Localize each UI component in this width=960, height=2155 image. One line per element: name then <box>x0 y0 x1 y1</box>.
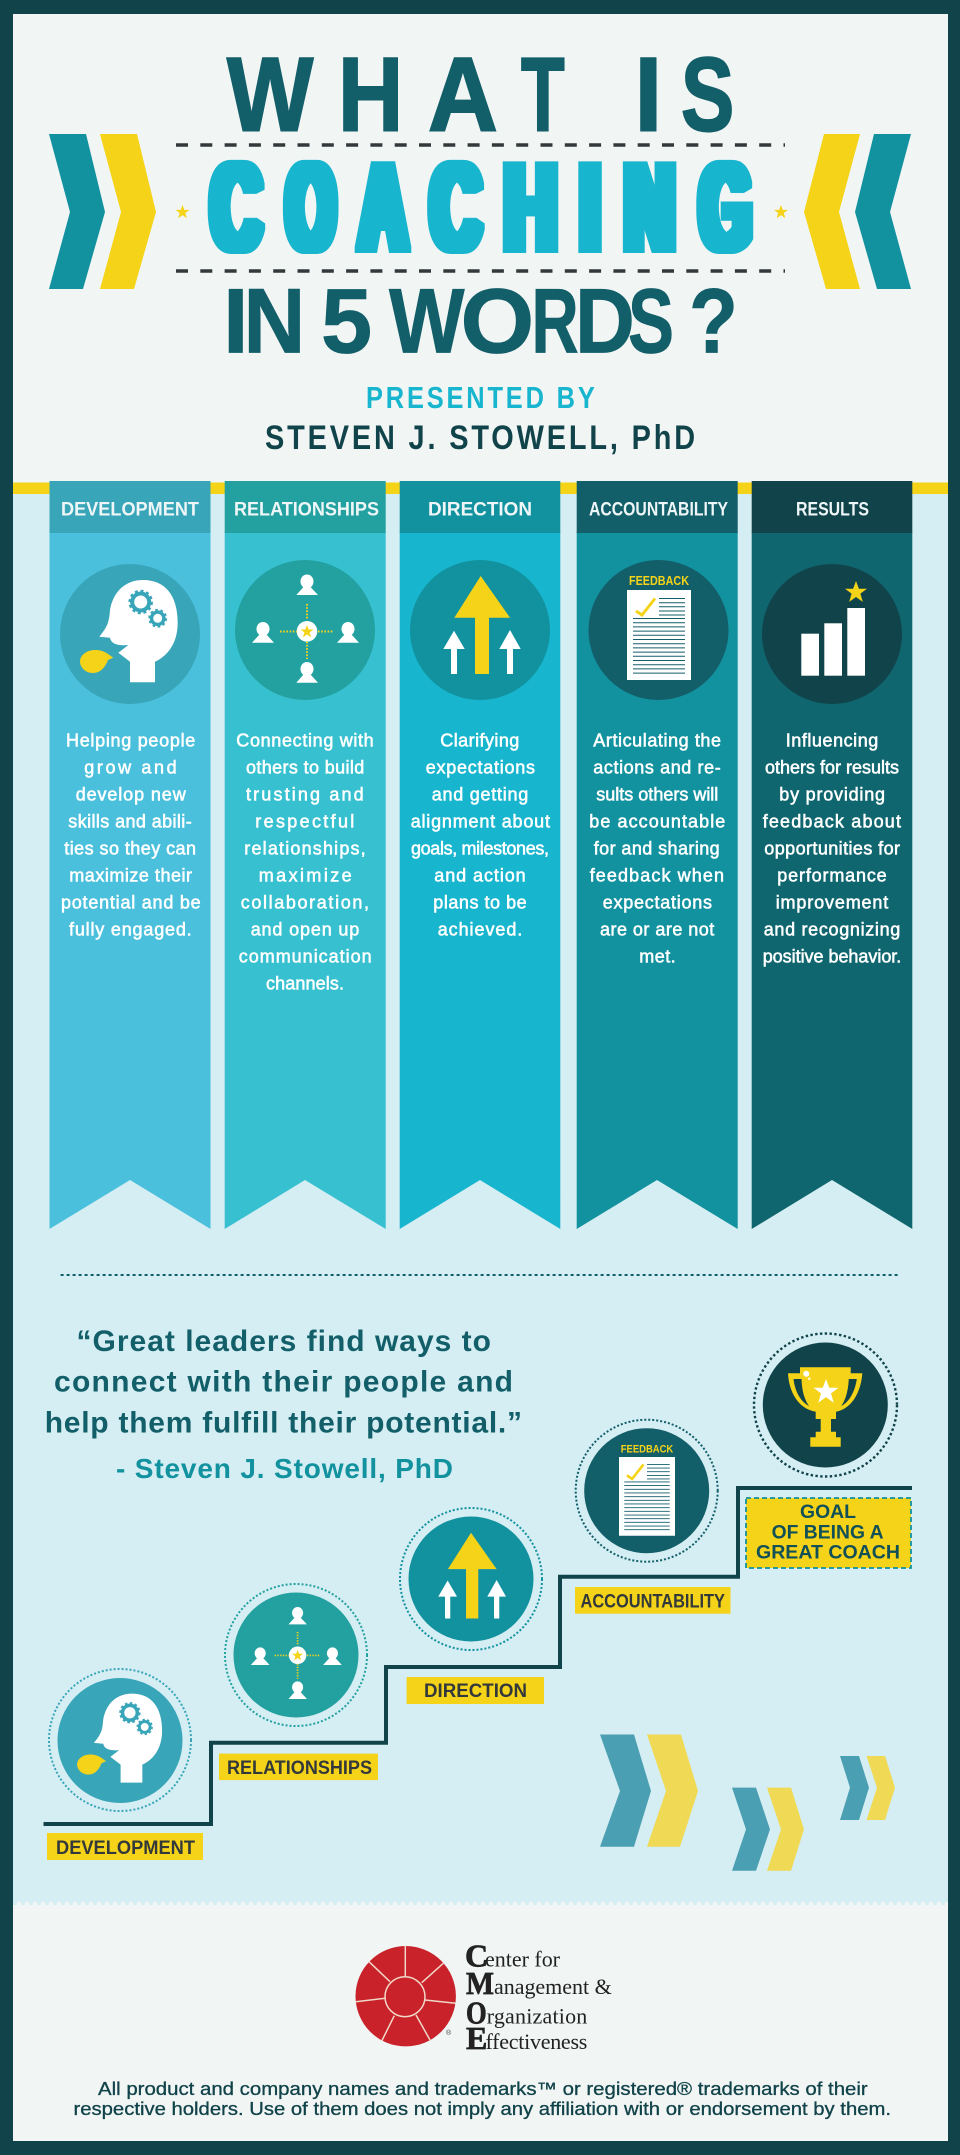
text: direction: goals, milestones, <box>411 838 549 858</box>
title: coaching: O <box>287 137 335 277</box>
icon: arrows up <box>410 560 550 700</box>
title: in 5 words: D <box>575 270 635 373</box>
text: results: by providing <box>779 784 885 804</box>
icon: connected people <box>235 560 375 700</box>
title: what is <box>227 35 734 154</box>
footer background <box>13 1902 948 2141</box>
title: coaching: A <box>360 137 407 276</box>
decorative chevrons medium <box>732 1788 804 1871</box>
goal label: OF BEING A <box>772 1521 884 1543</box>
footer disclaimer: All product and company names and trademarks™ or registered® trademarks of their <box>98 2079 868 2099</box>
logo: CMOE wheel <box>356 1946 456 2046</box>
title: in 5 words: 5 <box>321 271 372 373</box>
text: relationships: channels. <box>266 974 344 994</box>
title: in 5 words: I <box>223 271 249 373</box>
text: results: feedback about <box>763 812 901 832</box>
text: accountability: are or are not <box>600 920 714 940</box>
text: direction: Clarifying <box>440 730 519 750</box>
text: development: skills and abili- <box>68 812 192 832</box>
text: development: grow and <box>84 758 177 778</box>
step label: direction <box>407 1677 544 1704</box>
step label: development: DEVELOPMENT <box>56 1838 195 1859</box>
text: relationships <box>236 730 374 994</box>
logo: organization name: anagement & <box>494 1974 612 1999</box>
step label: accountability <box>575 1587 730 1614</box>
text: relationships: others to build <box>246 758 364 778</box>
text: results: and recognizing <box>764 920 900 940</box>
text: relationships: and open up <box>251 920 359 940</box>
text: accountability: feedback when <box>590 866 724 886</box>
text: relationships: respectful <box>255 812 354 832</box>
heading: development: DEVELOPMENT <box>61 498 199 520</box>
title: coaching: N <box>625 139 674 277</box>
goal label: GREAT COACH <box>756 1541 900 1563</box>
chevrons right <box>804 134 911 289</box>
text: development: ties so they can <box>64 838 196 858</box>
main light blue background <box>13 494 948 1902</box>
title: in 5 words: W <box>389 270 465 373</box>
title: what is: H <box>338 35 403 153</box>
icon: feedback document <box>588 560 728 700</box>
text: accountability: for and sharing <box>594 838 720 858</box>
text: direction: plans to be <box>433 892 527 912</box>
logo: CMOE wheel: ® <box>446 2029 452 2037</box>
logo: organization name: M <box>466 1965 494 2001</box>
step icon: relationships <box>225 1584 367 1726</box>
text: accountability: actions and re- <box>593 758 721 778</box>
step label: relationships: RELATIONSHIPS <box>227 1758 372 1779</box>
title: in 5 words <box>223 269 738 373</box>
text: accountability <box>589 730 725 966</box>
decorative chevrons small <box>840 1756 895 1820</box>
text: accountability: sults others will <box>596 784 718 804</box>
text: accountability: be accountable <box>589 812 725 832</box>
step icon: accountability: FEEDBACK <box>621 1444 674 1456</box>
text: accountability: expectations <box>603 892 712 912</box>
text: development: potential and be <box>61 892 201 912</box>
text: accountability: met. <box>639 946 676 966</box>
icon: bar chart with star <box>762 564 902 704</box>
presenter name: STEVEN J. STOWELL, PhD <box>265 418 695 457</box>
logo: organization name: enter for <box>485 1947 561 1972</box>
title: in 5 words: ? <box>689 270 738 373</box>
title: coaching: I <box>580 138 600 277</box>
text: development <box>61 730 201 940</box>
step icon: accountability <box>576 1420 718 1562</box>
step label: accountability: ACCOUNTABILITY <box>580 1592 725 1613</box>
text: results: improvement <box>776 892 888 912</box>
title: in 5 words: S <box>628 270 674 373</box>
text: direction: expectations <box>426 758 535 778</box>
text: results: opportunities for <box>764 838 900 858</box>
quote: “Great leaders find ways to <box>76 1325 491 1358</box>
panel: direction <box>400 481 560 1229</box>
yellow band <box>13 482 948 494</box>
icon: feedback document: FEEDBACK <box>629 573 689 588</box>
logo: organization name: rganization <box>487 2003 587 2028</box>
quote: help them fulfill their potential.” <box>45 1407 522 1440</box>
chevrons left <box>49 134 156 289</box>
text: direction: alignment about <box>411 812 550 832</box>
text: relationships: collaboration, <box>241 892 369 912</box>
footer disclaimer: respective holders. Use of them does not imply any affiliation with or endorsement by them. <box>74 2099 891 2119</box>
step label: direction: DIRECTION <box>424 1681 527 1702</box>
text: direction <box>411 730 550 940</box>
logo: organization name: C <box>465 1938 488 1974</box>
header background <box>13 14 948 484</box>
logo: organization name: O <box>466 1994 487 2030</box>
logo: organization name: E <box>466 2020 487 2056</box>
panel: development <box>50 481 210 1229</box>
quote: connect with their people and <box>54 1366 513 1399</box>
star right <box>774 205 788 218</box>
text: results: performance <box>777 866 887 886</box>
logo: organization name <box>465 1938 612 2056</box>
text: accountability: Articulating the <box>593 730 721 750</box>
presented by: PRESENTED BY <box>366 381 595 416</box>
heading: accountability: ACCOUNTABILITY <box>589 498 728 520</box>
step icon: trophy <box>754 1334 897 1476</box>
title: in 5 words: N <box>244 270 305 372</box>
text: relationships: communication <box>239 946 372 966</box>
panel: accountability <box>577 481 738 1229</box>
text: results: Influencing <box>786 730 878 750</box>
decorative chevrons large <box>600 1734 698 1847</box>
text: development: fully engaged. <box>69 920 192 940</box>
heading: relationships: RELATIONSHIPS <box>234 498 379 520</box>
title: coaching: G <box>700 137 751 276</box>
panel: relationships <box>225 481 386 1229</box>
icon: head with gears <box>60 564 200 704</box>
text: relationships: Connecting with <box>236 730 374 750</box>
text: results <box>763 730 901 966</box>
text: development: maximize their <box>69 866 192 886</box>
title: coaching: C <box>431 138 480 277</box>
title: what is: S <box>681 36 734 153</box>
quote <box>45 1325 522 1440</box>
title: in 5 words: O <box>460 269 534 372</box>
text: development: Helping people <box>66 730 195 750</box>
title: what is: I <box>634 35 662 153</box>
text: direction: and getting <box>432 784 528 804</box>
step icon: direction <box>400 1508 542 1650</box>
title: coaching <box>211 137 751 277</box>
text: results: positive behavior. <box>763 946 901 966</box>
footer disclaimer <box>74 2079 891 2119</box>
title: coaching: H <box>504 138 557 277</box>
title: what is: A <box>428 37 498 153</box>
panel: results <box>752 481 912 1229</box>
title: coaching: C <box>211 138 261 277</box>
text: results: others for results <box>765 758 899 778</box>
text: relationships: relationships, <box>244 838 366 858</box>
text: direction: and action <box>434 866 526 886</box>
quote attribution: - Steven J. Stowell, PhD <box>116 1453 453 1484</box>
staircase <box>44 1488 912 1824</box>
text: relationships: trusting and <box>246 784 364 804</box>
text: direction: achieved. <box>438 920 522 940</box>
goal label <box>746 1498 911 1568</box>
text: development: develop new <box>76 784 187 804</box>
text: relationships: maximize <box>259 866 352 886</box>
title: what is: T <box>521 37 565 154</box>
title: in 5 words: R <box>532 270 579 372</box>
heading: direction: DIRECTION <box>428 498 532 520</box>
heading: results: RESULTS <box>796 498 869 520</box>
goal label: GOAL <box>800 1501 856 1523</box>
title: what is: W <box>227 35 313 153</box>
step icon: development <box>49 1669 191 1811</box>
logo: organization name: ffectiveness <box>486 2029 587 2054</box>
star left <box>176 205 190 218</box>
